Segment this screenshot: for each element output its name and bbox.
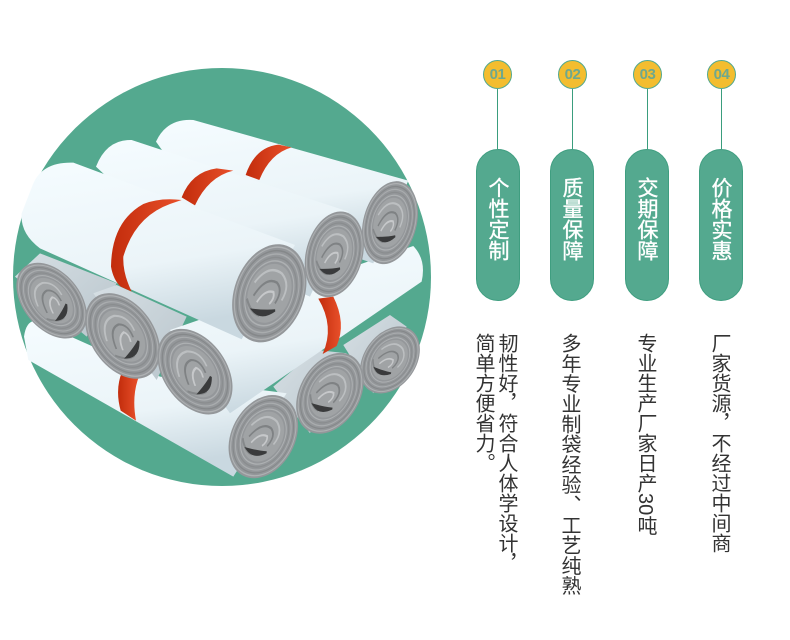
step 01: badge, connector, pill, description <box>472 60 520 573</box>
step 03: badge, connector, pill, description <box>625 60 669 535</box>
bottom front roll with red band <box>24 321 312 490</box>
step 04: badge, connector, pill, description <box>699 60 743 553</box>
badge 04 <box>707 60 736 89</box>
badge 03: 03 <box>640 66 655 83</box>
description 02: 多年专业制袋经验、工艺纯熟 <box>558 333 580 596</box>
badge 01: 01 <box>490 66 505 83</box>
pill: 价格实惠 <box>699 149 743 301</box>
badge 02: 02 <box>565 66 580 83</box>
badge 04: 04 <box>714 66 729 83</box>
description 04: 厂家货源，不经过中间商 <box>708 333 730 553</box>
top back roll with red band <box>156 120 427 270</box>
pill: 价格实惠: 价格实惠 <box>709 177 732 261</box>
top middle roll with red band <box>96 140 373 304</box>
description 01: 韧性好，符合人体学设计， <box>495 333 517 573</box>
middle centre roll <box>70 279 187 393</box>
pill: 交期保障 <box>625 149 669 301</box>
bottom back right roll <box>343 315 432 405</box>
product illustration: circle with stacked mailing bag rolls <box>13 68 431 486</box>
description 03: 专业生产厂家日产30吨 <box>634 333 656 535</box>
pill: 质量保障 <box>550 149 594 301</box>
pill: 交期保障: 交期保障 <box>635 177 658 261</box>
badge 03 <box>633 60 662 89</box>
badge 01 <box>483 60 512 89</box>
pill: 个性定制: 个性定制 <box>486 177 509 261</box>
connector 02 <box>572 89 573 149</box>
connector 03 <box>647 89 648 149</box>
pill: 质量保障: 质量保障 <box>560 177 583 261</box>
connector 04 <box>721 89 722 149</box>
description 01 <box>472 333 518 573</box>
step 02: badge, connector, pill, description <box>550 60 594 596</box>
background circle <box>13 68 431 486</box>
description 01: 简单方便省力。 <box>472 333 494 473</box>
bottom middle right roll <box>273 341 378 446</box>
pill: 个性定制 <box>476 149 520 301</box>
badge 02 <box>558 60 587 89</box>
middle left roll <box>2 249 117 352</box>
top front roll with red band <box>22 163 320 353</box>
connector 01 <box>497 89 498 149</box>
middle long roll with red band <box>142 246 423 429</box>
